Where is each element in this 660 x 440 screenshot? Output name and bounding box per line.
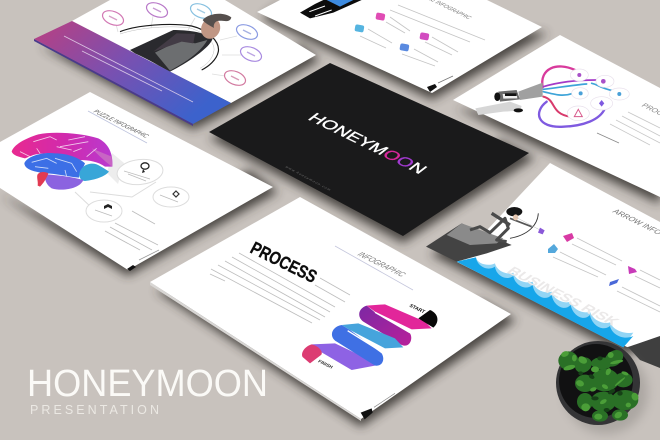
person (130, 14, 231, 72)
waves (457, 257, 633, 347)
slide: black title (209, 63, 529, 236)
cover title: HONEYMOON (304, 111, 430, 177)
footer tag (127, 265, 136, 271)
slide: portrait with bubbles (34, 0, 316, 126)
bubble labels (109, 8, 255, 80)
bulb icon (300, 0, 362, 18)
pot shadow (564, 350, 648, 434)
brain folds (20, 137, 97, 177)
bubble connectors (116, 16, 241, 76)
pot (556, 341, 640, 425)
archer (470, 207, 545, 242)
ghost word on waves: BUSINESS RISK (504, 264, 623, 328)
leaves (558, 347, 640, 422)
megaphone (475, 83, 543, 115)
slide: arrow infographic (426, 163, 660, 368)
paragraph (105, 211, 158, 250)
callout circles (116, 157, 164, 187)
rock (426, 223, 512, 262)
stream nodes (567, 69, 629, 121)
footer tag (361, 393, 395, 419)
text lines (553, 238, 660, 312)
band text (64, 36, 193, 102)
title: PUZZLE INFOGRAPHIC (91, 109, 150, 139)
text lines (360, 5, 485, 66)
slide: brain puzzle (0, 92, 273, 271)
right rock (628, 336, 660, 368)
heading INFOGRAPHIC: INFOGRAPHIC (355, 250, 409, 279)
heading PROCESS: PROCESS (247, 238, 320, 287)
cover small text: www.honeymoon.com (284, 166, 333, 192)
plant pot (556, 341, 648, 434)
main title: HONEYMOON (27, 363, 268, 405)
START label: START (408, 303, 426, 315)
brain (12, 133, 112, 190)
gradient band (34, 21, 231, 124)
zigzag ribbon (302, 303, 437, 370)
icon list (354, 12, 429, 52)
FINISH label: FINISH (317, 359, 334, 370)
paragraph (210, 253, 350, 323)
slide: megaphone (453, 35, 660, 197)
connector wedge (107, 153, 124, 184)
portrait arc (120, 24, 218, 70)
bubbles (100, 0, 264, 88)
slide: process (150, 197, 511, 421)
subtitle: PRESENTATION (30, 403, 159, 417)
icons (548, 233, 637, 286)
megaphone streams (539, 66, 629, 127)
callout icons (95, 163, 179, 216)
footer tag (427, 84, 437, 92)
slide: bulb with icons (257, 0, 542, 93)
